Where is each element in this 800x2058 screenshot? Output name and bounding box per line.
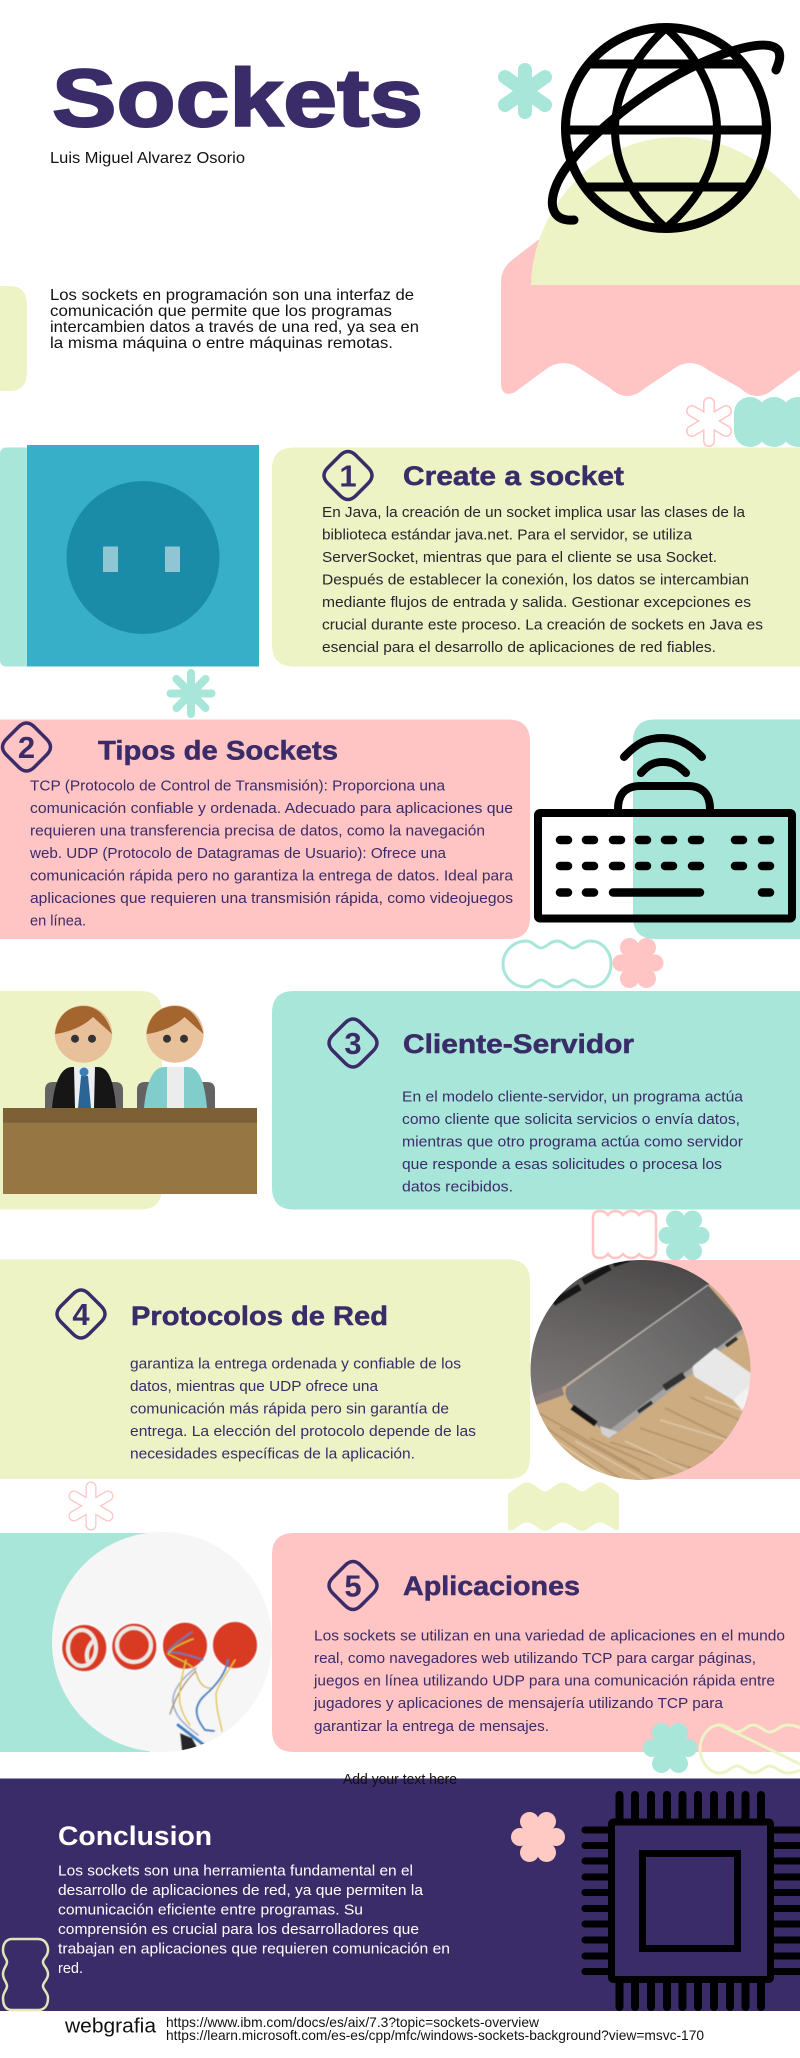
number badge 3 <box>329 1019 377 1067</box>
icon: pink outline asterisk small <box>74 1487 108 1525</box>
body text <box>58 1862 450 1977</box>
illustration: two people at a desk <box>3 1005 257 1194</box>
body text: comunicación rápida pero no garantiza la entrega de datos. Ideal para <box>30 868 514 884</box>
links <box>166 2014 704 2043</box>
panel: lime card <box>272 448 800 666</box>
body text: necesidades específicas de la aplicación. <box>130 1446 415 1463</box>
intro text: intercambien datos a través de una red, ya sea en <box>50 319 419 336</box>
hero shape: lime dome <box>531 137 800 285</box>
panel: mint card <box>272 991 800 1210</box>
heading: Conclusion <box>58 1821 212 1851</box>
label: webgrafia <box>64 2016 157 2038</box>
links: https://learn.microsoft.com/es-es/cpp/mfc/windows-sockets-background?view=msvc-170 <box>166 2027 704 2043</box>
body text <box>402 1088 744 1196</box>
panel: lime backing <box>0 991 162 1210</box>
body text: entrega. La elección del protocolo depende de las <box>130 1423 476 1440</box>
intro text <box>50 287 419 352</box>
intro text: comunicación que permite que los programas <box>50 303 392 320</box>
body text: esencial para el desarrollo de aplicaciones de red fiables. <box>322 639 716 656</box>
author: Luis Miguel Alvarez Osorio <box>50 150 245 167</box>
body text: trabajan en aplicaciones que requieren comunicación en <box>58 1940 450 1958</box>
number badge 4: 4 <box>72 1297 90 1332</box>
icon: mint flower <box>658 1210 710 1260</box>
body text: Después de establecer la conexión, los datos se intercambian <box>322 572 749 588</box>
number badge 2 <box>2 723 50 771</box>
heading: Create a socket <box>403 461 624 491</box>
icon: pink flower on purple <box>511 1812 565 1862</box>
panel: pink card <box>0 720 530 939</box>
number badge 3: 3 <box>344 1026 362 1061</box>
icon: mint flower lower <box>643 1723 697 1773</box>
number badge 5 <box>329 1562 377 1610</box>
body text <box>322 504 763 656</box>
panel: mint backing <box>0 1533 150 1752</box>
body text: en línea. <box>30 912 86 930</box>
intro text: la misma máquina o entre máquinas remotas. <box>50 335 393 352</box>
section 2: tipos de sockets <box>0 720 800 939</box>
title: Sockets <box>52 53 423 144</box>
decorative lime outline blob <box>3 1939 48 2010</box>
section 3: cliente-servidor <box>0 991 800 1210</box>
body text: comprensión es crucial para los desarrolladores que <box>58 1921 419 1938</box>
photo: usb hub on laptop <box>530 1260 750 1480</box>
section: conclusion <box>0 1772 800 2011</box>
number badge 1 <box>324 452 372 500</box>
footer: webgrafia <box>64 2014 704 2043</box>
body text: Los sockets son una herramienta fundamental en el <box>58 1862 413 1880</box>
body text: red. <box>58 1960 83 1977</box>
decorative mint outline blob <box>503 941 611 987</box>
intro text: Los sockets en programación son una interfaz de <box>50 287 414 304</box>
hero shape: pink wave <box>501 230 800 396</box>
placeholder text: Add your text here <box>343 1772 457 1788</box>
body text: jugadores y aplicaciones de mensajería utilizando TCP para <box>313 1695 724 1712</box>
body text <box>29 778 514 930</box>
icon: microchip <box>585 1795 800 2007</box>
body text: mediante flujos de entrada y salida. Gestionar excepciones es <box>322 594 751 611</box>
photo: wall sockets with wires <box>50 1530 275 1755</box>
section 4: protocolos de red <box>0 1250 800 1488</box>
body text: comunicación más rápida pero sin garantía de <box>130 1401 449 1418</box>
body text: web. UDP (Protocolo de Datagramas de Usuario): Ofrece una <box>29 845 447 862</box>
heading: Aplicaciones <box>403 1571 580 1601</box>
body text: real, como navegadores web utilizando TCP para cargar páginas, <box>314 1650 756 1667</box>
number badge 5: 5 <box>344 1568 362 1604</box>
body text: En Java, la creación de un socket implica usar las clases de la <box>322 504 746 521</box>
decorative lime wave blob <box>508 1482 619 1531</box>
body text: garantizar la entrega de mensajes. <box>314 1718 549 1735</box>
heading: Tipos de Sockets <box>98 736 338 766</box>
body text: ServerSocket, mientras que para el cliente se usa Socket. <box>322 549 717 566</box>
heading: Cliente-Servidor <box>403 1029 635 1059</box>
body text: comunicación confiable y ordenada. Adecuado para aplicaciones que <box>30 800 513 817</box>
number badge 1: 1 <box>339 458 357 494</box>
panel: pink card <box>272 1533 800 1752</box>
icon: mint asterisk <box>505 70 545 112</box>
section 5: aplicaciones <box>0 1530 800 1755</box>
panel: lime card <box>0 1260 530 1479</box>
illustration: socket <box>0 445 259 666</box>
body text: comunicación eficiente entre programas. Su <box>58 1902 363 1918</box>
body text: datos recibidos. <box>402 1178 513 1196</box>
body text: desarrollo de aplicaciones de red, ya que permiten la <box>58 1882 424 1899</box>
body text: Los sockets se utilizan en una variedad de aplicaciones en el mundo <box>314 1628 785 1645</box>
body text: datos, mientras que UDP ofrece una <box>130 1378 379 1395</box>
section 1: create a socket <box>0 445 800 666</box>
panel: purple band <box>0 1778 800 2011</box>
decorative mint blob <box>734 397 800 447</box>
body text: garantiza la entrega ordenada y confiable de los <box>130 1356 461 1373</box>
icon: pink flower <box>612 938 664 988</box>
icon: mint eight-arm asterisk <box>170 673 212 714</box>
body text: como cliente que solicita servicios o envía datos, <box>402 1111 740 1128</box>
number badge 4 <box>57 1290 105 1338</box>
body text: biblioteca estándar java.net. Para el servidor, se utiliza <box>322 526 693 544</box>
body text: aplicaciones que requieren una transmisión rápida, como videojuegos <box>30 890 513 907</box>
body text: que responde a esas solicitudes o procesa los <box>402 1156 722 1173</box>
panel: intro <box>0 286 419 391</box>
body text <box>130 1356 476 1463</box>
links: https://www.ibm.com/docs/es/aix/7.3?topic=sockets-overview <box>166 2014 540 2030</box>
panel: pink backing <box>640 1260 800 1479</box>
body text: En el modelo cliente-servidor, un programa actúa <box>402 1088 744 1106</box>
body text: requieren una transferencia precisa de datos, como la navegación <box>30 822 485 840</box>
icon: globe <box>552 28 780 228</box>
body text: TCP (Protocolo de Control de Transmisión): Proporciona una <box>30 778 446 794</box>
decorative lime pill <box>0 286 27 391</box>
decorative pink outline blob <box>593 1211 656 1258</box>
body text: crucial durante este proceso. La creación de sockets en Java es <box>322 616 763 634</box>
heading: Protocolos de Red <box>131 1301 388 1331</box>
body text: mientras que otro programa actúa como servidor <box>402 1134 743 1150</box>
number badge 2: 2 <box>18 730 35 765</box>
panel: mint backing <box>633 720 800 939</box>
icon: pink outline asterisk <box>692 403 726 441</box>
body text <box>313 1628 785 1735</box>
icon: wireless keyboard <box>538 738 792 918</box>
body text: juegos en línea utilizando UDP para una comunicación rápida entre <box>313 1673 775 1690</box>
decorative lime outline blob <box>700 1725 800 1773</box>
